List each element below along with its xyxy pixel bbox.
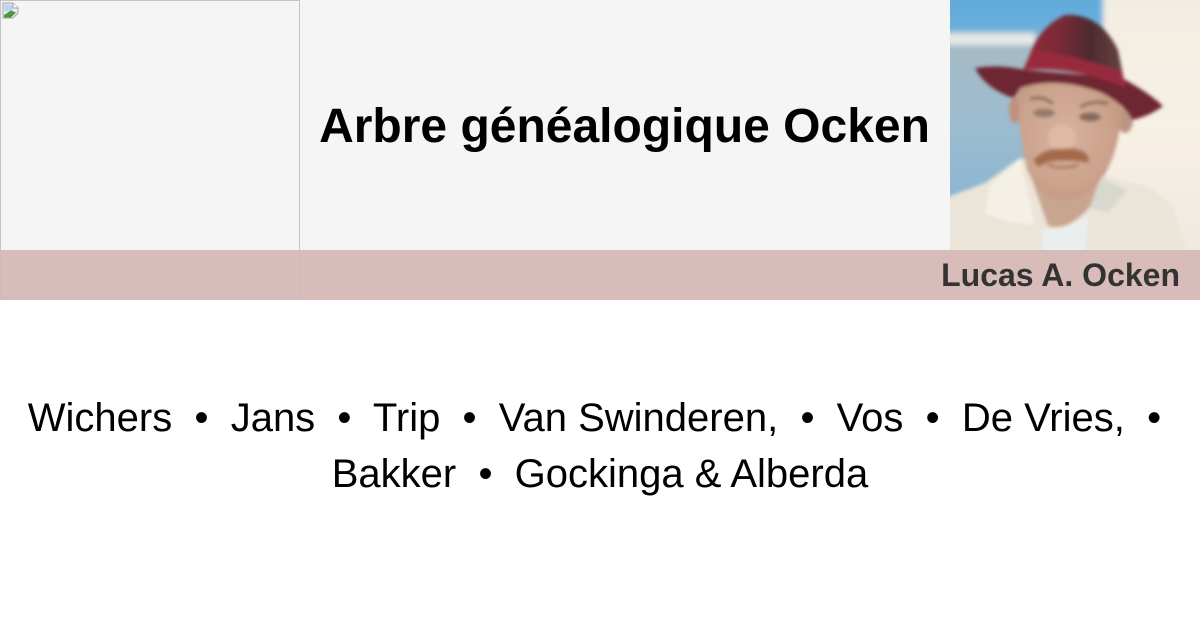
panel: header background: [0, 0, 1200, 250]
heading: title: Arbre généalogique Ocken: [319, 100, 930, 153]
shirt: [950, 156, 1185, 250]
text: author name: Lucas A. Ocken: [941, 257, 1180, 293]
image: portrait of man in a red hat: [950, 0, 1200, 250]
hat brim: [975, 66, 1163, 120]
moustache: [1033, 148, 1089, 167]
neck: [1032, 180, 1100, 229]
eyes: [1030, 98, 1053, 104]
icon: broken image: [2, 2, 18, 18]
hat crown: [1029, 12, 1125, 76]
ears: [1009, 97, 1021, 123]
hat band: [1023, 50, 1126, 88]
text block: family names: Wichers • Jans • Trip • Van Swinderen, • Vos • De Vries, • Bakker • Gockinga & Alberda: [28, 396, 1172, 496]
panel: name band: [0, 250, 1200, 300]
face: [1016, 80, 1124, 180]
panel: broken image placeholder: [0, 0, 300, 250]
